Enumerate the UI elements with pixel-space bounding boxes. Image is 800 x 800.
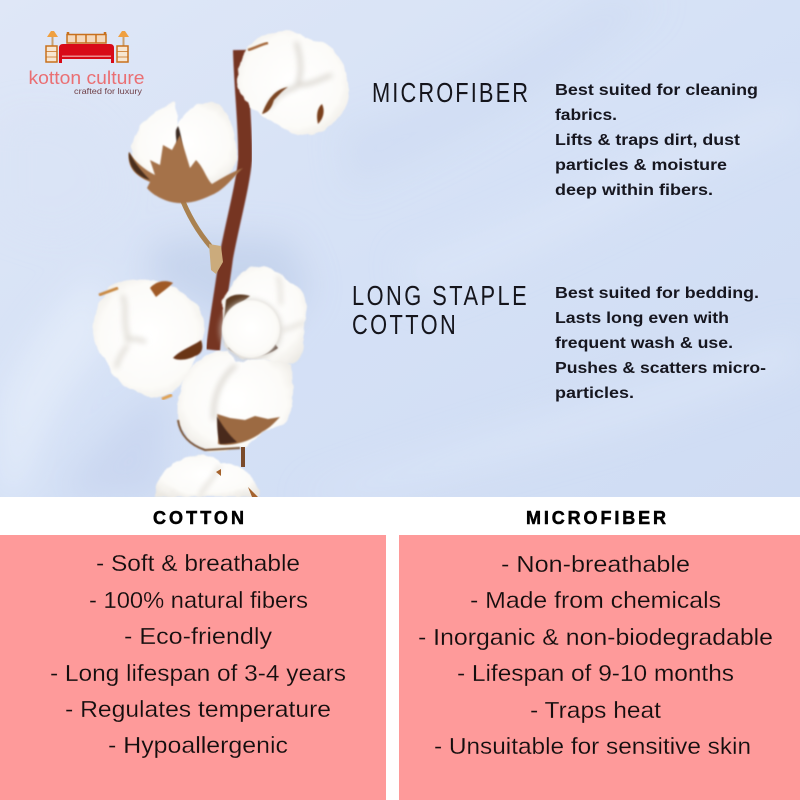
- panel: cotton properties: - Eco-friendly: [124, 623, 273, 649]
- text block: microfiber description: deep within fibers.: [555, 182, 713, 199]
- text block: microfiber description: [555, 82, 758, 199]
- panel: microfiber properties: - Traps heat: [530, 697, 662, 723]
- panel: cotton properties: - 100% natural fibers: [89, 587, 308, 613]
- panel: microfiber properties: - Non-breathable: [501, 551, 690, 577]
- comparison band white background: [0, 497, 800, 800]
- cotton boll: left upper: [129, 102, 243, 203]
- heading: Long staple cotton: [352, 280, 527, 341]
- heading: Long staple cotton: COTTON: [352, 309, 456, 341]
- text block: microfiber description: Best suited for cleaning: [555, 82, 758, 99]
- text block: long staple cotton description: frequent wash & use.: [555, 335, 733, 352]
- column heading: Cotton: COTTON: [153, 508, 244, 528]
- text block: microfiber description: particles & moisture: [555, 157, 727, 174]
- background photo: blue fabric: [0, 0, 800, 497]
- panel: cotton properties: - Hypoallergenic: [108, 732, 288, 758]
- panel: cotton properties: - Long lifespan of 3-4 years: [50, 660, 346, 686]
- logo: Kotton Culture: [28, 31, 144, 96]
- brand name: kotton culture: [28, 68, 144, 88]
- text block: microfiber description: fabrics.: [555, 107, 617, 124]
- icon: bed with lamps and nightstands: [46, 31, 129, 63]
- panel: cotton properties: - Soft & breathable: [96, 550, 300, 576]
- heading: Microfiber: MICROFIBER: [372, 77, 528, 109]
- panel: cotton properties: - Regulates temperature: [65, 696, 331, 722]
- heading: Long staple cotton: LONG STAPLE: [352, 280, 527, 312]
- panel: microfiber properties: - Made from chemicals: [470, 587, 721, 613]
- cotton branch photo: [93, 31, 349, 497]
- panel: microfiber properties: - Lifespan of 9-10 months: [457, 660, 734, 686]
- panel: microfiber properties: [399, 535, 800, 800]
- small stalk: [180, 194, 211, 247]
- panel: microfiber properties: - Unsuitable for sensitive skin: [434, 733, 751, 759]
- stem: [213, 50, 245, 350]
- cotton boll: centre bottom: [177, 350, 293, 467]
- tagline: crafted for luxury: [74, 86, 143, 96]
- panel: microfiber properties: - Inorganic & non-biodegradable: [418, 624, 773, 650]
- cotton boll: right: [220, 266, 307, 364]
- text block: long staple cotton description: particles.: [555, 385, 634, 402]
- column heading: Microfiber: MICROFIBER: [526, 508, 666, 528]
- text block: long staple cotton description: Best suited for bedding.: [555, 285, 759, 302]
- cotton boll: lower left: [93, 280, 204, 399]
- cotton boll: bottom: [155, 455, 260, 497]
- text block: long staple cotton description: Pushes & scatters micro-: [555, 360, 766, 377]
- text block: long staple cotton description: Lasts long even with: [555, 310, 729, 327]
- text block: microfiber description: Lifts & traps dirt, dust: [555, 132, 740, 149]
- cotton boll: top: [237, 31, 349, 136]
- panel: cotton properties: [0, 535, 386, 800]
- text block: long staple cotton description: [555, 285, 766, 402]
